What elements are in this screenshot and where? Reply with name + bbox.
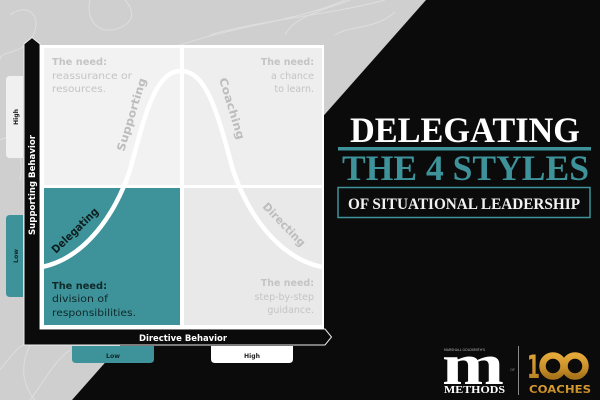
y axis label: Supporting Behavior [28,134,38,235]
logo: methods: MARSHALL GOLDSMITH'S [444,348,486,352]
quadrant: directing [184,188,322,325]
logo: methods: METHODS [444,385,506,396]
quadrant: directing: step-by-step [255,292,314,303]
curve label: delegating: Delegating [49,205,101,256]
quadrant: coaching [184,48,322,185]
quadrant: delegating: division of [52,294,109,305]
title: delegating: DELEGATING [350,110,580,150]
tab: y axis low: Low [13,249,20,263]
tab: y axis high [6,76,23,158]
grey topographic background [0,0,426,400]
tab: y axis high: High [13,109,20,125]
curve label: directing: Directing [260,200,308,249]
tab: x axis high: High [244,353,260,360]
title rule [338,147,591,150]
bell curve [42,71,322,267]
curve label: coaching: Coaching [216,76,247,141]
x axis label: Directive Behavior [139,334,228,344]
curve label: supporting: Supporting [114,76,149,153]
tab: x axis low: Low [106,353,120,360]
quadrant: supporting [44,48,180,185]
logo: 100 coaches [527,348,591,396]
tab: x axis high [211,346,293,363]
quadrant: directing: The need: [261,278,314,289]
tab: x axis low [72,346,154,363]
quadrant: supporting: reassurance or [52,71,132,82]
logo divider [518,346,519,395]
quadrant matrix [40,45,324,329]
tab: y axis low [6,215,23,297]
logo: 100 coaches: 1 [527,348,540,386]
quadrant: directing: guidance. [267,305,314,316]
quadrant: delegating: responsibilities. [52,308,136,319]
logo: 100 coaches: COACHES [529,383,591,396]
quadrant: delegating [44,188,180,325]
subtitle box [338,188,590,218]
quadrant: coaching: to learn. [274,84,314,95]
quadrant: coaching: a chance [271,71,314,82]
subtitle box: OF SITUATIONAL LEADERSHIP [348,196,581,213]
quadrant: coaching: The need: [261,57,314,68]
logo: methods: m [442,332,504,397]
title: the 4 styles: THE 4 STYLES [342,148,589,188]
quadrant: supporting: The need: [52,57,107,68]
axis frame [24,38,332,345]
logo: of: OF [510,368,515,372]
quadrant: delegating: The need: [52,281,107,292]
quadrant: supporting: resources. [52,84,106,95]
